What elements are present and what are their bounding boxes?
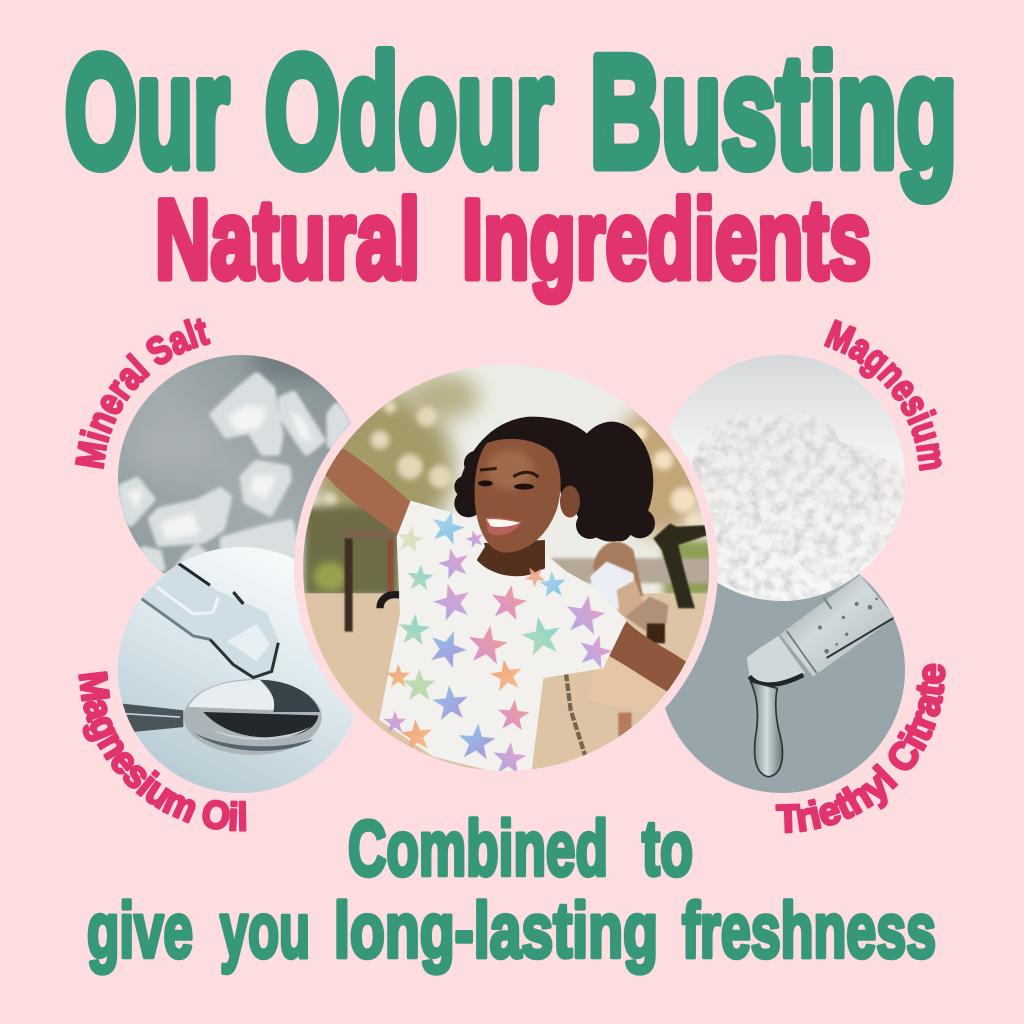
t-shirt — [379, 501, 627, 772]
central photo: girl playing — [300, 360, 720, 780]
curved label: Mineral Salt: Mineral Salt — [74, 318, 211, 469]
right tree trunk — [653, 523, 708, 608]
closing line: give you long-lasting freshness: you — [220, 886, 310, 974]
subtitle: Natural Ingredients: Natural — [155, 177, 420, 302]
closing line: give you long-lasting freshness: long-lasting — [334, 886, 658, 974]
forehead highlight — [487, 450, 533, 490]
dropper — [142, 563, 278, 678]
curved label: Magnesium: Magnesium — [824, 319, 942, 471]
smile — [485, 517, 522, 535]
spoon — [122, 679, 322, 755]
closing line: give you long-lasting freshness — [87, 886, 936, 974]
curved label: Magnesium Oil: Magnesium Oil — [78, 671, 246, 832]
ear — [560, 486, 580, 518]
photo circle: magnesium powder — [668, 355, 905, 601]
subtitle: Natural Ingredients — [155, 177, 871, 302]
dropper with droplet — [747, 575, 895, 777]
hair — [454, 417, 655, 542]
shirt stars — [384, 507, 615, 775]
right arm — [604, 622, 686, 693]
raised left arm — [324, 449, 410, 535]
face — [475, 439, 561, 553]
neck — [477, 540, 545, 576]
closing line: Combined to: Combined — [348, 804, 608, 892]
closing line: Combined to: to — [642, 804, 693, 892]
title: Our Odour Busting: Odour — [265, 24, 553, 200]
swing chain — [566, 673, 585, 755]
central photo ring — [294, 356, 718, 780]
child in background — [587, 542, 668, 737]
photo circle: magnesium oil and spoon — [118, 547, 355, 793]
photo circle: triethyl citrate background — [665, 574, 905, 793]
title: Our Odour Busting: Our — [65, 24, 229, 200]
eyes and brows — [478, 468, 538, 490]
title: Our Odour Busting — [65, 24, 957, 200]
closing line: give you long-lasting freshness: give — [87, 886, 193, 974]
curved label: Triethyl Citrate: Triethyl Citrate — [775, 663, 946, 834]
photo background: sky, trees and playground — [300, 360, 720, 600]
photo circle: mineral salt crystals — [118, 355, 352, 574]
sandy ground — [300, 593, 720, 780]
swing frame and seat — [340, 530, 399, 632]
